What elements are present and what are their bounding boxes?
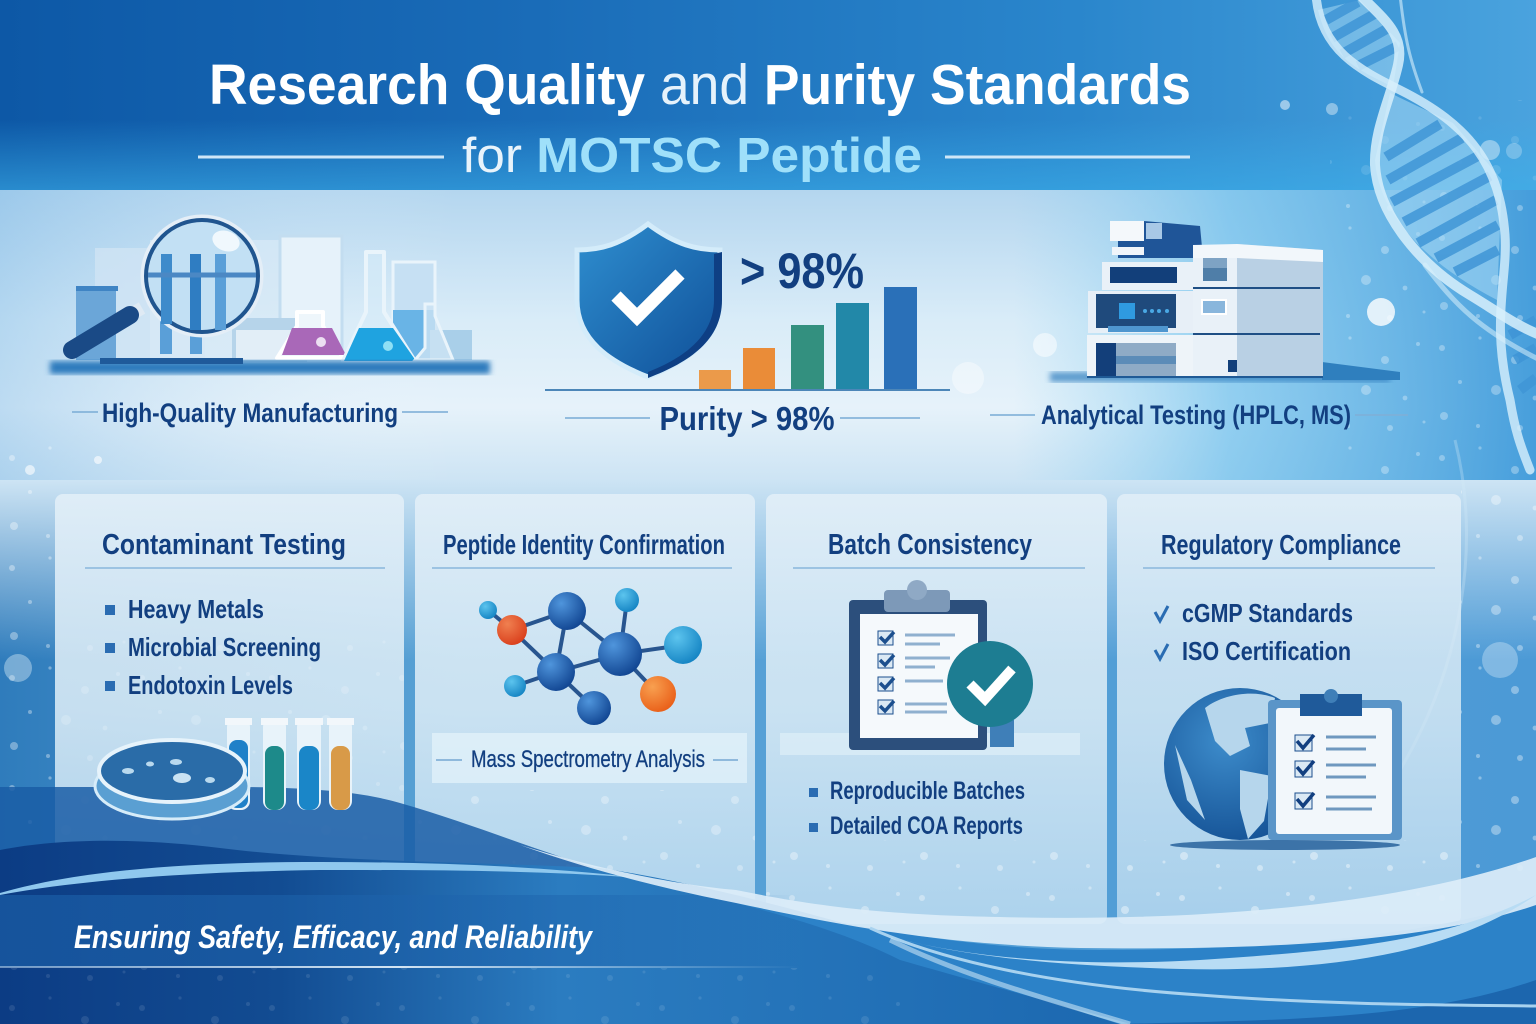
panel: regulatory compliance [1117,494,1461,924]
list: Microbial Screening [128,632,321,662]
title [209,53,1191,183]
caption: Mass Spectrometry Analysis [471,746,705,773]
lower field [0,841,1120,1024]
heading: Peptide Identity Confirmation [443,529,725,560]
list: ISO Certification [1182,636,1351,666]
list: cGMP Standards [1182,598,1353,628]
stat: > 98% [740,243,864,299]
list: Detailed COA Reports [830,812,1023,840]
feature: high-quality manufacturing [50,217,490,428]
label rules [72,412,1408,418]
feature: purity [545,224,950,437]
thin strands [879,895,1536,969]
icon: shield with check [577,224,722,378]
heading: Batch Consistency [828,529,1032,561]
title rules [198,156,1190,158]
DNA helix decoration [1316,0,1536,770]
caption [432,733,747,783]
heading: Contaminant Testing [102,529,346,561]
icon: lab with magnifier and flasks [50,217,490,374]
title: Research Quality and Purity Standards [209,53,1191,117]
highlight line [0,966,800,968]
white ribbon [520,845,1536,948]
feature: analytical testing [1041,221,1400,430]
list [105,594,321,700]
icon: globe with checklist [1164,688,1402,850]
icon: molecule [479,588,702,725]
icon: petri dish and test tubes [95,718,354,819]
bar chart [545,287,950,390]
list [1155,598,1353,666]
bottom wave [0,787,1536,1024]
dark ground layer [0,787,800,1024]
panel: peptide identity [415,494,755,924]
ribbon highlight left [0,862,640,895]
icon: lab instrument [1050,221,1400,382]
list: Reproducible Batches [830,777,1025,805]
list: Heavy Metals [128,594,264,624]
list: Endotoxin Levels [128,670,293,700]
label: Analytical Testing (HPLC, MS) [1041,400,1351,430]
light band [0,895,800,967]
heading: Regulatory Compliance [1161,529,1401,560]
title: for MOTSC Peptide [462,129,922,183]
icon: clipboard with check badge [780,580,1080,755]
panel: contaminant testing [55,494,404,924]
tagline: Ensuring Safety, Efficacy, and Reliability [74,919,594,955]
list [809,777,1025,840]
label: High-Quality Manufacturing [102,398,398,428]
panel: batch consistency [766,494,1107,924]
label: Purity > 98% [660,400,834,437]
